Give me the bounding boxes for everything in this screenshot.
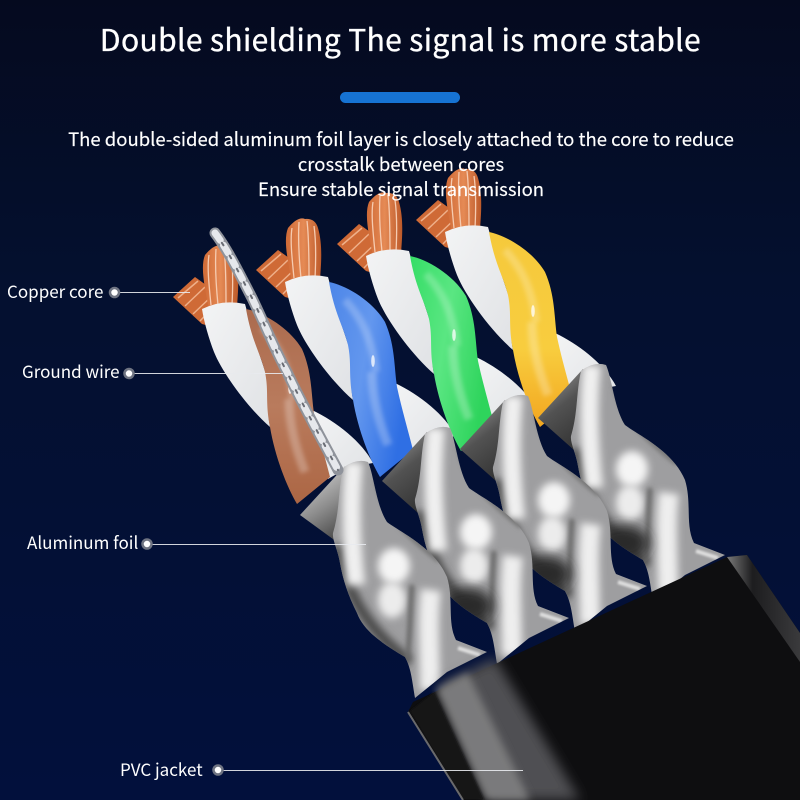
PVC jacket: [408, 555, 800, 800]
description text: [68, 126, 734, 202]
title accent bar: [340, 92, 460, 103]
label: copper core: Copper core: [7, 278, 103, 303]
description text: crosstalk between cores: [298, 151, 504, 177]
pair 1: brown and white wires: [173, 245, 373, 504]
label: aluminum foil: Aluminum foil: [27, 529, 138, 554]
description text: Ensure stable signal transmission: [258, 176, 544, 202]
description text: The double-sided aluminum foil layer is closely attached to the core to reduce: [68, 126, 734, 152]
pair 4: yellow and white wires: [416, 168, 616, 427]
title: Double shielding The signal is more stable: [100, 16, 701, 60]
pair 2: blue and white wires: [256, 218, 456, 477]
aluminum foil strand 4: [538, 364, 725, 592]
cable illustration: [108, 168, 800, 800]
label: ground wire: Ground wire: [22, 358, 120, 383]
aluminum foil strand 1: [300, 455, 495, 705]
label dots: [110, 288, 222, 774]
aluminum foil strand 3: [460, 394, 647, 628]
ground wire: [215, 233, 338, 470]
label: PVC jacket: PVC jacket: [120, 756, 203, 781]
aluminum foil strand 2: [382, 421, 577, 671]
leader lines: [118, 292, 523, 770]
pair 3: green and white wires: [337, 192, 537, 451]
